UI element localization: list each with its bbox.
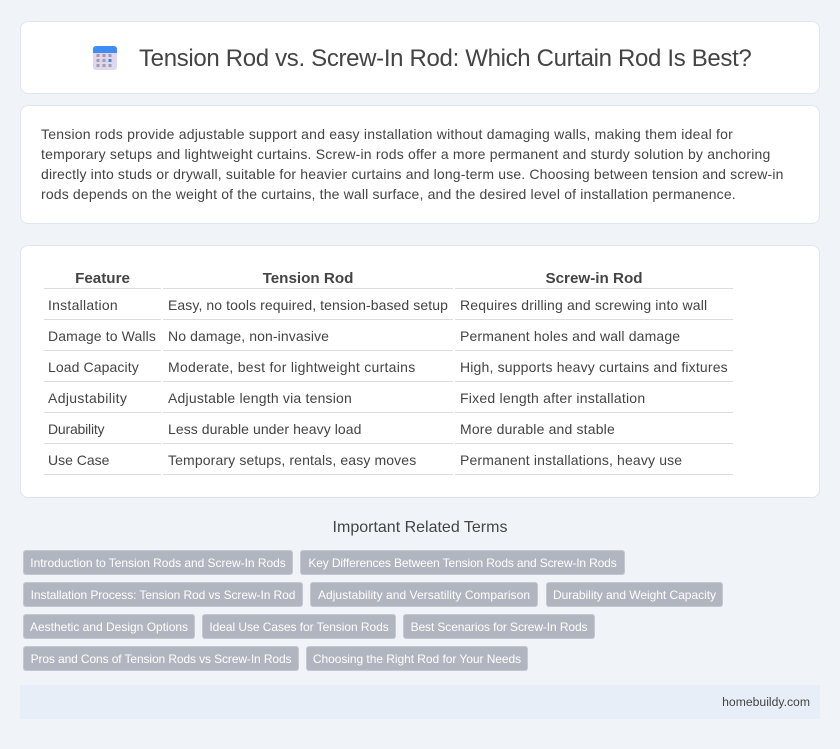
chip bbox=[306, 646, 528, 671]
row: damage to walls: Permanent holes and wall damage bbox=[460, 328, 680, 344]
related terms chips bbox=[23, 550, 723, 671]
chip: Ideal Use Cases for Tension Rods bbox=[209, 620, 389, 634]
chip: Choosing the Right Rod for Your Needs bbox=[313, 652, 521, 666]
chip: Introduction to Tension Rods and Screw-In Rods bbox=[30, 556, 286, 570]
table header row: Screw-in Rod bbox=[545, 270, 643, 287]
intro text: directly into studs or drywall, suitable for heavier curtains and long-term use. Choosing between tension and screw-in bbox=[41, 166, 784, 182]
row: damage to walls: Damage to Walls bbox=[48, 328, 156, 344]
row: use case bbox=[48, 452, 682, 468]
related terms heading: Important Related Terms bbox=[333, 519, 507, 536]
panel: comparison table bbox=[20, 245, 820, 498]
intro text: Tension rods provide adjustable support and easy installation without damaging walls, making them ideal for bbox=[41, 126, 733, 142]
row: load capacity: High, supports heavy curtains and fixtures bbox=[460, 359, 728, 375]
row: durability: Durability bbox=[48, 421, 104, 437]
row: damage to walls bbox=[48, 328, 680, 344]
chip bbox=[23, 614, 195, 639]
row: adjustability: Adjustability bbox=[48, 390, 127, 406]
chip bbox=[310, 582, 538, 607]
intro text: rods depends on the weight of the curtains, the wall surface, and the desired level of installation permanence. bbox=[41, 186, 736, 202]
comparison table bbox=[44, 270, 733, 475]
row: durability bbox=[48, 421, 615, 437]
chip: Durability and Weight Capacity bbox=[553, 588, 716, 602]
table header row bbox=[75, 270, 643, 287]
row: use case: Use Case bbox=[48, 452, 109, 468]
row: durability: More durable and stable bbox=[460, 421, 615, 437]
chip bbox=[546, 582, 723, 607]
row: adjustability: Fixed length after installation bbox=[460, 390, 645, 406]
panel: introduction bbox=[20, 105, 820, 224]
chip bbox=[23, 582, 303, 607]
footer brand: homebuildy.com bbox=[722, 695, 810, 709]
row: installation: Installation bbox=[48, 297, 118, 313]
row: use case: Temporary setups, rentals, easy moves bbox=[168, 452, 416, 468]
row: installation: Easy, no tools required, tension-based setup bbox=[168, 297, 448, 313]
intro text bbox=[41, 126, 784, 202]
row: installation: Requires drilling and screwing into wall bbox=[460, 297, 707, 313]
chip: Key Differences Between Tension Rods and Screw-In Rods bbox=[308, 556, 617, 570]
title: Tension Rod vs. Screw-In Rod: Which Curtain Rod Is Best? bbox=[139, 45, 751, 72]
chip bbox=[23, 646, 299, 671]
chip: Aesthetic and Design Options bbox=[30, 620, 188, 634]
table header row: Feature bbox=[75, 270, 130, 287]
row: damage to walls: No damage, non-invasive bbox=[168, 328, 329, 344]
chip bbox=[202, 614, 396, 639]
row: adjustability bbox=[48, 390, 645, 406]
footer bar bbox=[20, 685, 820, 719]
chip bbox=[403, 614, 595, 639]
row: load capacity bbox=[48, 359, 728, 375]
header panel bbox=[20, 21, 820, 94]
chip bbox=[300, 550, 625, 575]
row: use case: Permanent installations, heavy use bbox=[460, 452, 682, 468]
icon: calendar bbox=[93, 46, 117, 70]
row: load capacity: Moderate, best for lightweight curtains bbox=[168, 359, 416, 375]
chip: Best Scenarios for Screw-In Rods bbox=[411, 620, 587, 634]
row: installation bbox=[48, 297, 707, 313]
row: adjustability: Adjustable length via tension bbox=[168, 390, 352, 406]
table header row: Tension Rod bbox=[263, 270, 353, 287]
chip: Installation Process: Tension Rod vs Screw-In Rod bbox=[31, 588, 295, 602]
row: durability: Less durable under heavy load bbox=[168, 421, 362, 437]
chip: Pros and Cons of Tension Rods vs Screw-In Rods bbox=[31, 652, 291, 666]
chip bbox=[23, 550, 293, 575]
row: load capacity: Load Capacity bbox=[48, 359, 139, 375]
chip: Adjustability and Versatility Comparison bbox=[318, 588, 530, 602]
intro text: temporary setups and lightweight curtains. Screw-in rods offer a more permanent and sturdy solution by anchoring bbox=[41, 146, 771, 162]
